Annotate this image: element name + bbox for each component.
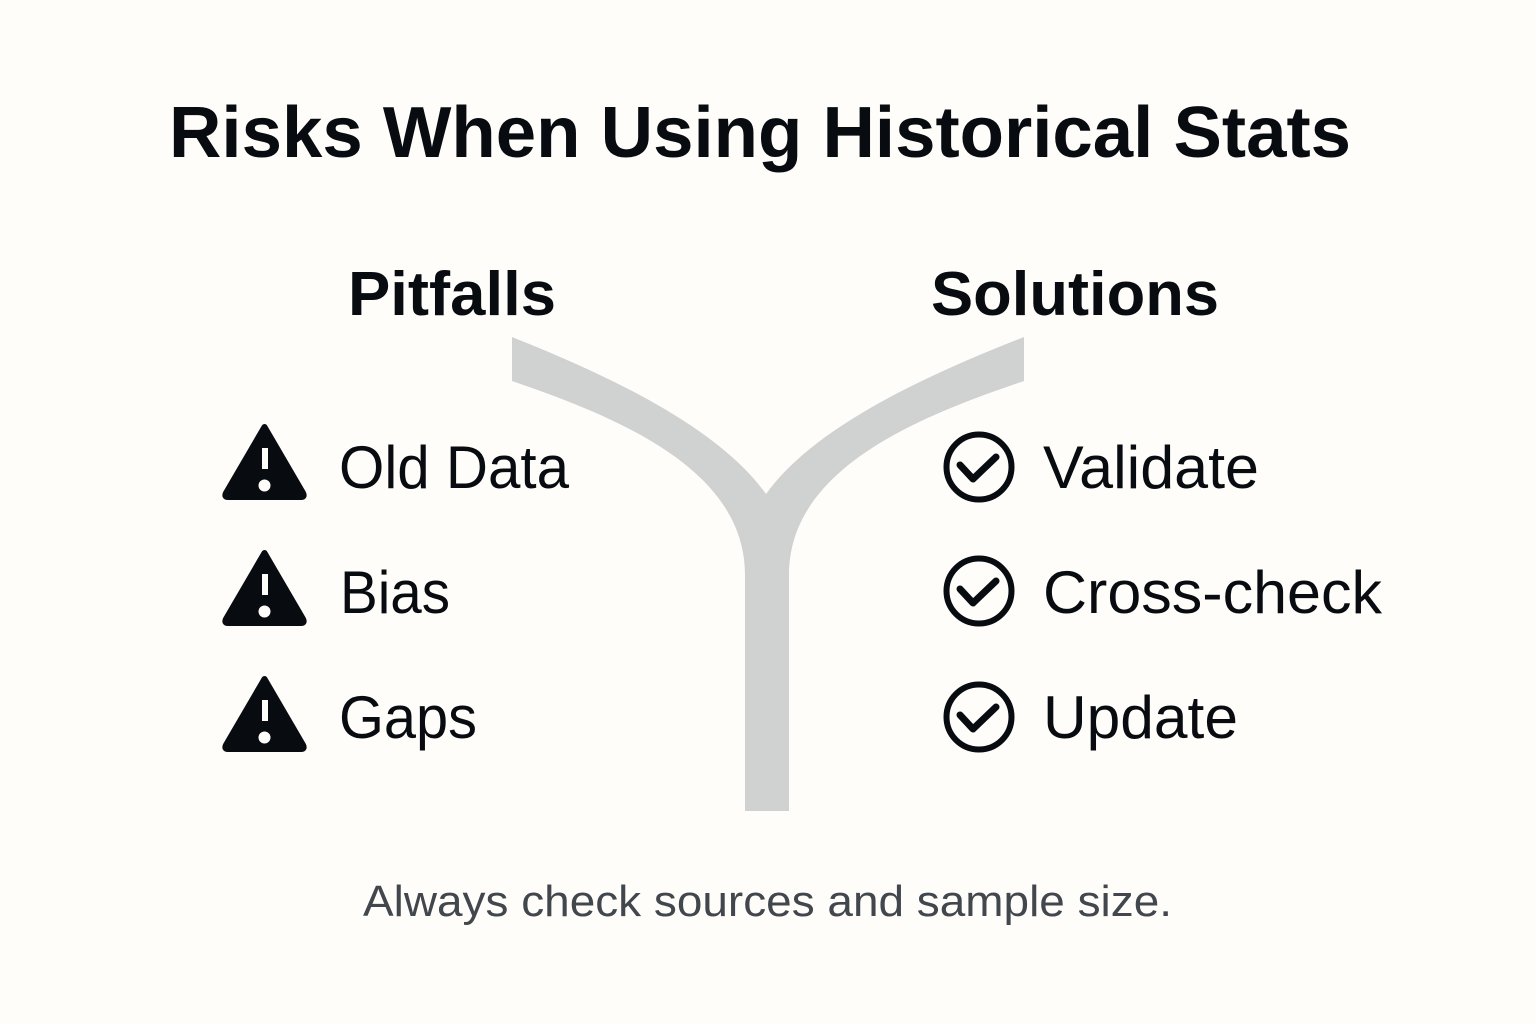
icon: warning triangle [225, 427, 304, 497]
label: old data: Old Data [339, 434, 570, 501]
icon: warning triangle [225, 553, 304, 623]
label: gaps: Gaps [339, 684, 477, 751]
footer note: Always check sources and sample size. [363, 877, 1172, 926]
pitfall: bias [225, 553, 450, 626]
label: update: Update [1043, 684, 1238, 751]
icon: check circle [946, 558, 1012, 624]
icon: warning triangle [225, 679, 304, 749]
heading: pitfalls: Pitfalls [348, 260, 556, 329]
icon: check circle [946, 684, 1012, 750]
title: Risks When Using Historical Stats [169, 93, 1351, 173]
pitfall: gaps [225, 679, 477, 751]
solution: update [946, 684, 1238, 751]
label: validate: Validate [1043, 434, 1259, 501]
icon: check circle [946, 434, 1012, 500]
solution: validate [946, 434, 1259, 501]
pitfall: old data [225, 427, 570, 501]
diverging Y-shaped arrow [512, 337, 1024, 811]
label: cross-check: Cross-check [1043, 559, 1383, 626]
heading: solutions: Solutions [931, 260, 1219, 329]
label: bias: Bias [340, 559, 450, 626]
solution: cross-check [946, 558, 1383, 626]
